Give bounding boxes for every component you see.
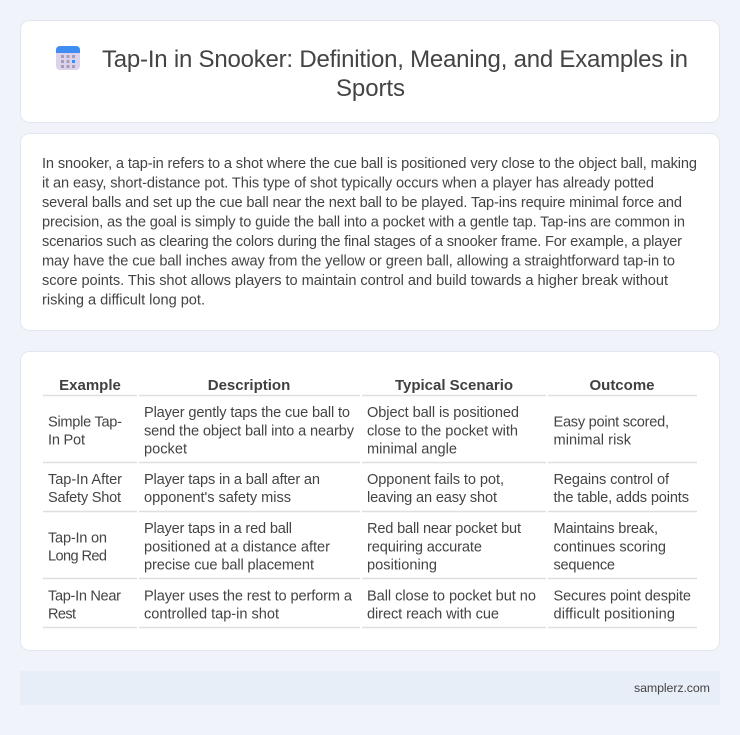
table row: Tap-In After Safety Shot: leaving an easy shot xyxy=(367,490,497,506)
table row: Simple Tap-In Pot: pocket xyxy=(144,442,187,458)
table row: Simple Tap-In Pot: send the object ball into a nearby xyxy=(144,424,355,440)
panel: title card xyxy=(20,20,720,122)
table header: Description xyxy=(208,377,290,394)
text block: paragraph xyxy=(42,156,697,308)
table row: Tap-In on Long Red: Long Red xyxy=(48,548,107,564)
table header: Outcome xyxy=(589,377,655,394)
footer source text: samplerz.com xyxy=(634,681,710,695)
table row: Simple Tap-In Pot: Simple Tap- xyxy=(48,414,122,430)
table row: Tap-In on Long Red: positioning xyxy=(367,558,437,574)
table row: Tap-In Near Rest: direct reach with cue xyxy=(367,606,499,622)
text block: paragraph: risking a difficult long pot. xyxy=(42,292,205,308)
table row: Tap-In on Long Red: precise cue ball placement xyxy=(144,558,314,574)
table row: Simple Tap-In Pot: Object ball is positioned xyxy=(367,405,519,421)
table row: Tap-In Near Rest: Ball close to pocket but no xyxy=(367,588,536,604)
icon: calendar xyxy=(56,46,80,70)
title: Sports xyxy=(336,75,405,102)
footer bar xyxy=(20,671,720,705)
table row: Tap-In on Long Red: continues scoring xyxy=(554,540,666,556)
table row: Tap-In Near Rest xyxy=(48,588,691,622)
text block: paragraph: scenarios such as clearing the colors during the final stages of a snooker frame. For example, a player xyxy=(42,234,682,250)
table row: Tap-In on Long Red xyxy=(48,521,666,574)
table row: Tap-In Near Rest: controlled tap-in shot xyxy=(144,606,279,622)
table row: Simple Tap-In Pot: Easy point scored, xyxy=(554,414,669,430)
text block: paragraph: may have the cue ball inches away from the yellow or green ball, allowing a straightforward tap-in to xyxy=(42,254,675,270)
table row: Tap-In on Long Red: positioned at a distance after xyxy=(144,540,330,556)
table row: Tap-In on Long Red: requiring accurate xyxy=(367,540,482,556)
table row: Tap-In After Safety Shot xyxy=(48,472,689,506)
table header xyxy=(59,377,655,394)
table row: Simple Tap-In Pot: minimal angle xyxy=(367,442,457,458)
text block: paragraph: precision, as the goal is simply to guide the ball into a pocket with a gentle tap. Tap-ins are common in xyxy=(42,214,685,230)
table row: Tap-In After Safety Shot: Opponent fails to pot, xyxy=(367,472,504,488)
text block: paragraph: it an easy, short-distance pot. This type of shot typically occurs when a player has already potted xyxy=(42,176,654,192)
text block: paragraph: In snooker, a tap-in refers to a shot where the cue ball is positioned very close to the object ball, making xyxy=(42,156,697,172)
table row: Tap-In on Long Red: Maintains break, xyxy=(554,521,658,537)
table row: Tap-In After Safety Shot: opponent's safety miss xyxy=(144,490,291,506)
table row: Tap-In Near Rest: Player uses the rest to perform a xyxy=(144,588,353,604)
table row: Simple Tap-In Pot: minimal risk xyxy=(554,432,632,448)
table row: Tap-In on Long Red: Tap-In on xyxy=(48,530,107,546)
table row: Tap-In After Safety Shot: Tap-In After xyxy=(48,472,122,488)
table row: Simple Tap-In Pot: close to the pocket with xyxy=(367,424,518,440)
table row: Tap-In on Long Red: Red ball near pocket but xyxy=(367,521,521,537)
table row: Tap-In Near Rest: Tap-In Near xyxy=(48,588,121,604)
table header: Example xyxy=(59,377,121,394)
table row: Tap-In Near Rest: difficult positioning xyxy=(554,606,675,622)
table row: Simple Tap-In Pot: In Pot xyxy=(48,432,85,448)
table row: Simple Tap-In Pot xyxy=(48,405,669,458)
table header: Typical Scenario xyxy=(395,377,513,394)
table row: Tap-In Near Rest: Secures point despite xyxy=(554,588,691,604)
title xyxy=(102,46,688,102)
table row: Tap-In on Long Red: Player taps in a red ball xyxy=(144,521,292,537)
text block: paragraph: score points. This shot allows players to maintain control and build towards a higher break without xyxy=(42,273,668,289)
panel: definition paragraph xyxy=(20,134,720,330)
table row: Tap-In After Safety Shot: Regains control of xyxy=(554,472,670,488)
table row: Tap-In After Safety Shot: Player taps in a ball after an xyxy=(144,472,320,488)
panel: examples table xyxy=(20,352,720,650)
text block: paragraph: several balls and set up the cue ball near the next ball to be played. Tap-ins require minimal force and xyxy=(42,195,682,211)
table row: Tap-In After Safety Shot: Safety Shot xyxy=(48,490,121,506)
table row: Tap-In on Long Red: sequence xyxy=(554,558,615,574)
table row: Tap-In Near Rest: Rest xyxy=(48,606,76,622)
table row: Tap-In After Safety Shot: the table, adds points xyxy=(554,490,689,506)
table row: Simple Tap-In Pot: Player gently taps the cue ball to xyxy=(144,405,350,421)
title: Tap-In in Snooker: Definition, Meaning, and Examples in xyxy=(102,46,688,73)
